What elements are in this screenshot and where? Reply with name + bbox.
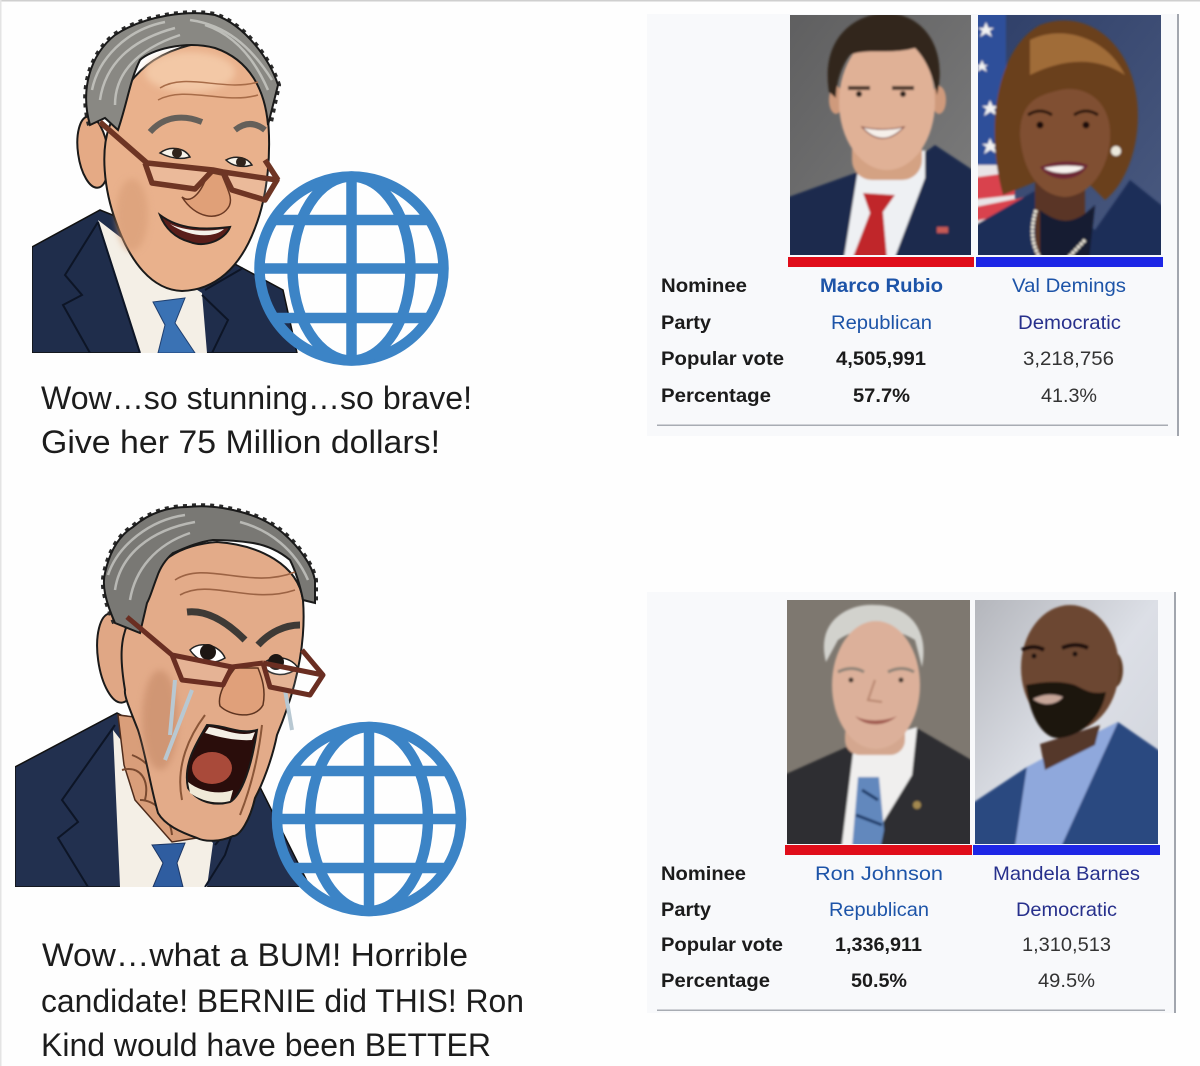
photo: Marco Rubio [790, 15, 971, 255]
row: percentage: Percentage [661, 385, 771, 407]
row: popular vote [661, 348, 1114, 370]
icon: globe 1 [260, 176, 444, 360]
row: party: Party [661, 899, 711, 921]
panel: Florida results [647, 5, 1179, 436]
row: popular vote [661, 934, 1111, 956]
eyebrows [150, 118, 265, 132]
suit [32, 210, 297, 353]
caption 1: Give her 75 Million dollars! [41, 424, 440, 460]
row: percentage: Percentage [661, 970, 770, 992]
party bar: Democratic [973, 845, 1160, 855]
row: nominee: Nominee [661, 275, 747, 297]
eyes [160, 148, 252, 166]
party bar: Republican [785, 845, 972, 855]
nose [182, 172, 230, 216]
table bottom rule [657, 424, 1168, 426]
pupils [200, 644, 284, 670]
table bottom rule [657, 1010, 1165, 1011]
row: party: Democratic [1016, 899, 1117, 921]
tears [165, 680, 292, 760]
face [122, 542, 304, 841]
row: party: Democratic [1018, 312, 1121, 334]
row: party: Party [661, 312, 711, 334]
row: nominee [661, 863, 1140, 885]
hair strands [92, 20, 272, 105]
caption 2: Kind would have been BETTER [41, 1027, 491, 1063]
upper teeth [205, 727, 255, 740]
lapels [63, 222, 243, 353]
tie [152, 843, 185, 887]
hair bumpy edge [86, 13, 278, 125]
row: nominee [661, 275, 1126, 297]
row: party: Republican [831, 312, 932, 334]
tongue [192, 752, 232, 784]
caption 1: Wow…so stunning…so brave! [41, 380, 472, 416]
eyes [190, 645, 298, 674]
row: nominee: Val Demings [1012, 275, 1126, 297]
row: nominee: Nominee [661, 863, 746, 885]
shirt [98, 220, 207, 353]
row: popular vote: Popular vote [661, 934, 783, 956]
pupils [172, 148, 246, 167]
glasses [127, 617, 323, 695]
party bar: Republican [788, 257, 974, 267]
forehead wrinkles [175, 572, 295, 595]
photo: Mandela Barnes [965, 600, 1170, 860]
cartoon: smiling senator [32, 13, 297, 353]
globe ring [277, 727, 461, 911]
row: percentage: 41.3% [1041, 385, 1097, 407]
row: popular vote: 1,336,911 [835, 934, 922, 956]
teeth [170, 224, 224, 235]
tie [153, 298, 195, 353]
hair bumpy edge [104, 506, 315, 623]
party bar: Democratic [976, 257, 1163, 267]
caption 2 [41, 937, 524, 1063]
hair [86, 13, 278, 130]
neck wrinkles [122, 755, 172, 835]
row: popular vote: Popular vote [661, 348, 784, 370]
nose [219, 668, 264, 715]
curved meridian [292, 176, 410, 360]
table rows [661, 863, 1140, 992]
row: nominee: Mandela Barnes [993, 863, 1140, 885]
curved meridian [310, 727, 428, 911]
row: party [661, 899, 1117, 921]
caption 1 [41, 380, 472, 460]
row: party [661, 312, 1121, 334]
icon: globe 2 [277, 727, 461, 911]
hair [104, 506, 315, 633]
glasses [100, 122, 278, 200]
row: percentage: 57.7% [853, 385, 910, 407]
panel: Wisconsin results [647, 592, 1176, 1013]
row: percentage: 50.5% [851, 970, 907, 992]
neck [117, 714, 196, 843]
face [104, 43, 269, 291]
shirt [113, 730, 213, 887]
lapels [58, 725, 250, 887]
mouth wrinkles [180, 715, 262, 815]
meridians and parallels [278, 727, 460, 911]
ear [76, 116, 106, 189]
globe ring [260, 176, 444, 360]
row: percentage: 49.5% [1038, 970, 1095, 992]
row: popular vote: 1,310,513 [1022, 934, 1111, 956]
panel right border [1174, 592, 1176, 1013]
row: popular vote: 4,505,991 [836, 348, 926, 370]
suit [15, 713, 310, 887]
cheek shading [142, 670, 178, 770]
ear [96, 613, 126, 704]
cartoon: screaming senator [15, 506, 323, 887]
row: nominee: Marco Rubio [820, 275, 943, 297]
hair strands [108, 515, 308, 600]
panel background [647, 14, 1178, 436]
angry eyebrows [187, 612, 300, 645]
cheek shading [116, 179, 148, 251]
photo: Val Demings [978, 15, 1161, 255]
caption 2: candidate! BERNIE did THIS! Ron [41, 983, 524, 1019]
forehead highlight [145, 52, 235, 92]
panel background [647, 592, 1174, 1013]
caption 2: Wow…what a BUM! Horrible [42, 937, 468, 973]
meridians and parallels [260, 177, 443, 360]
open mouth [187, 725, 257, 804]
photo: Ron Johnson [777, 600, 980, 860]
row: nominee: Ron Johnson [815, 863, 943, 885]
mouth [160, 215, 230, 244]
row: percentage [661, 970, 1095, 992]
lower teeth [188, 782, 233, 802]
row: popular vote: 3,218,756 [1023, 348, 1114, 370]
panel right border [1177, 14, 1179, 436]
row: party: Republican [829, 899, 929, 921]
forehead wrinkles [158, 82, 258, 100]
row: percentage [661, 385, 1097, 407]
table rows [661, 275, 1126, 407]
